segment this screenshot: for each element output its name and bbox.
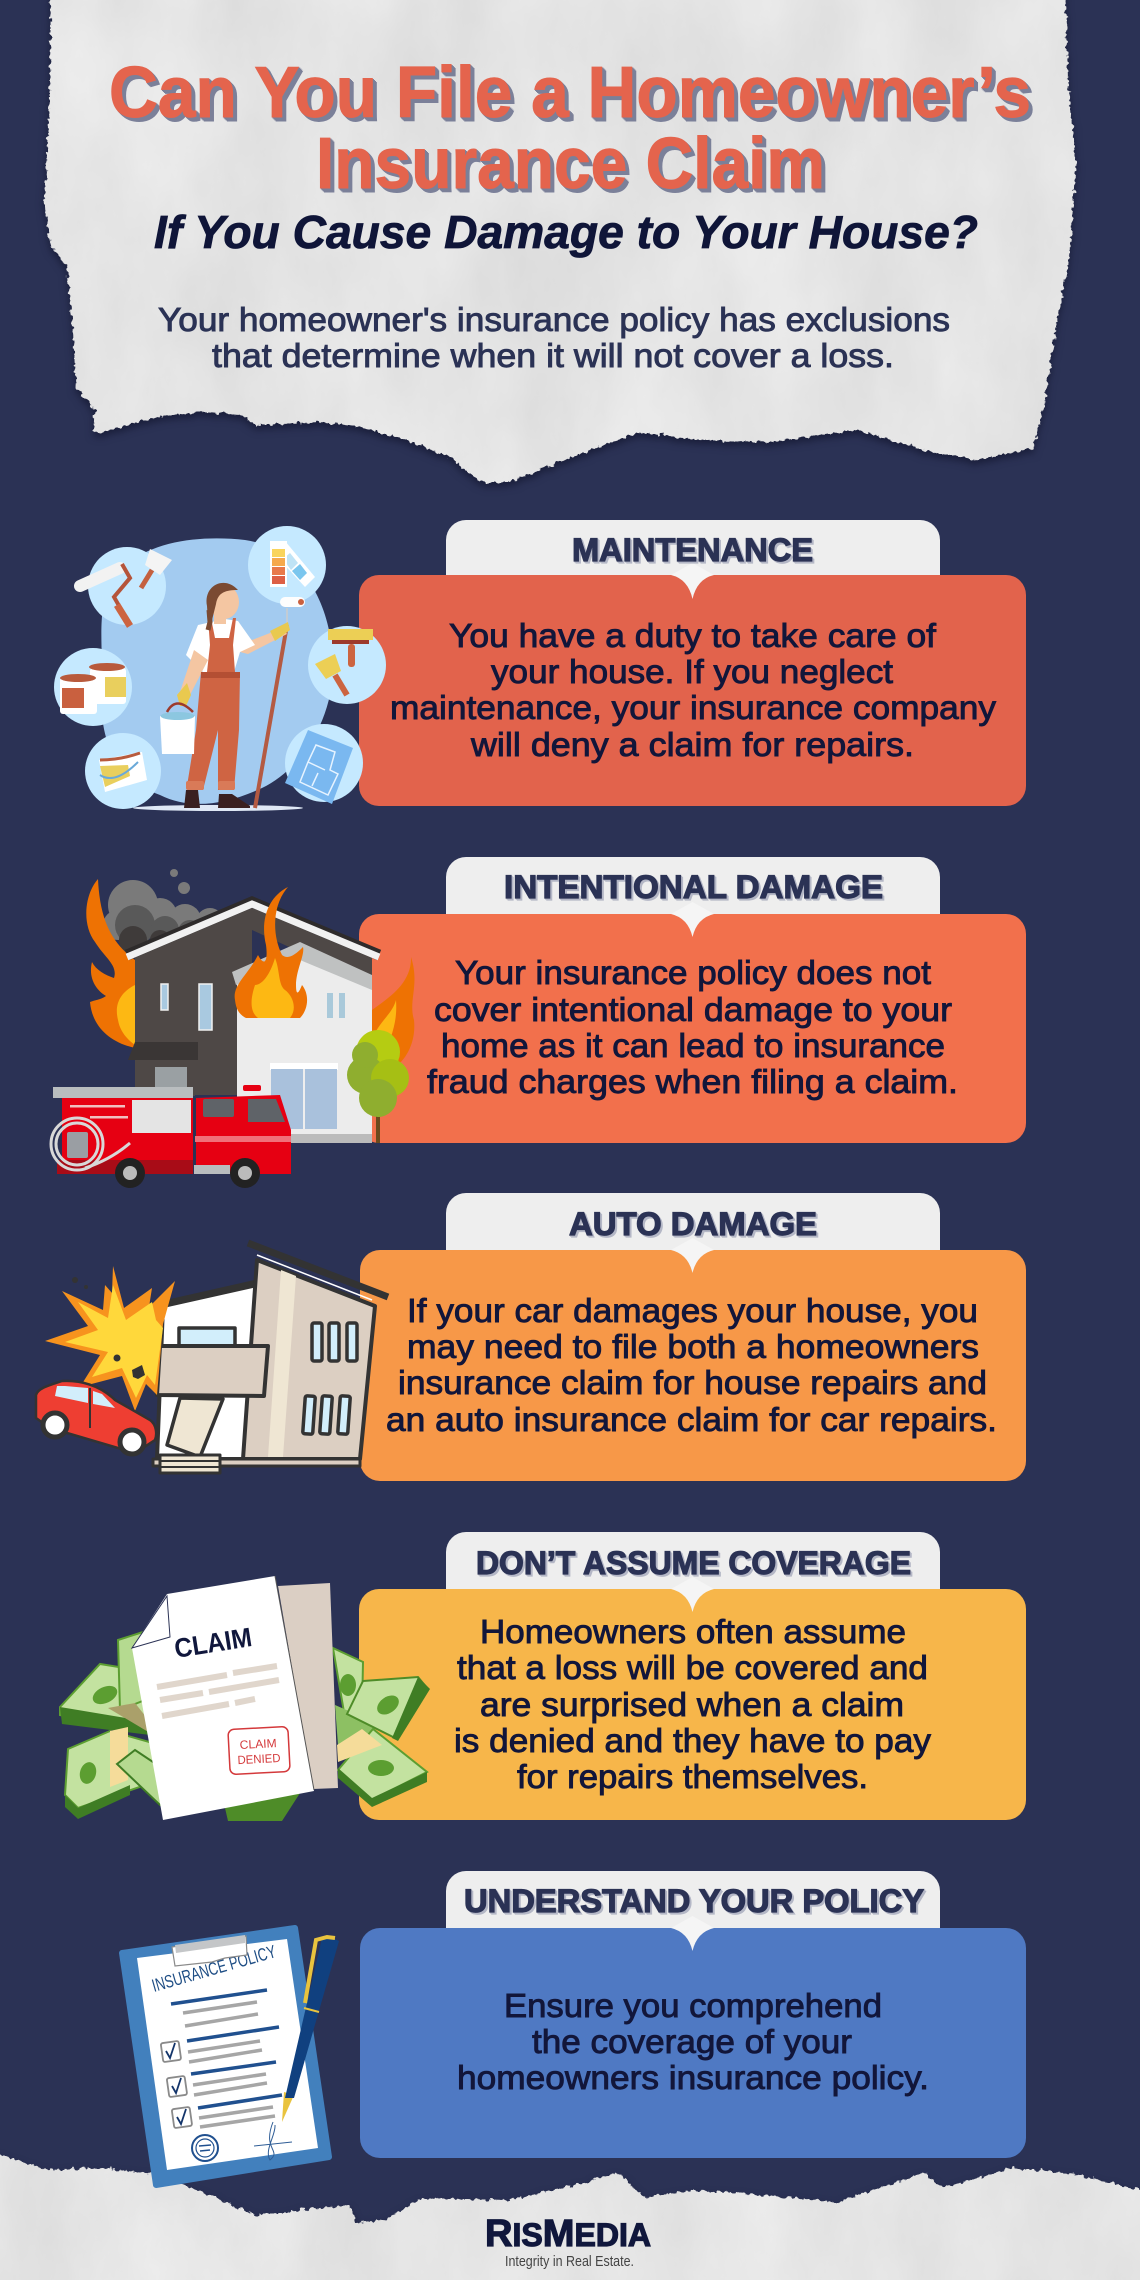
icon: brushes <box>315 629 373 695</box>
panel: auto damage: AUTO DAMAGE <box>569 1206 817 1242</box>
panel: understand your policy <box>360 1871 1026 2158</box>
icon: paint cans <box>60 663 126 714</box>
panel: intentional damage: INTENTIONAL DAMAGE <box>504 869 883 905</box>
panel: don't assume coverage: for repairs themselves. <box>517 1758 868 1795</box>
illustration: denied claim on cash <box>60 1576 430 1821</box>
icon: blob background <box>101 538 333 804</box>
icon: clipboard <box>122 1928 329 2185</box>
panel: auto damage: may need to file both a homeowners <box>407 1328 979 1365</box>
icon: house <box>127 902 379 1143</box>
panel: intentional damage: Your insurance policy does not <box>455 954 931 991</box>
intro text: Your homeowner's insurance policy has exclusions <box>158 301 950 338</box>
panel: auto damage: an auto insurance claim for car repairs. <box>386 1401 997 1438</box>
logo: RISMedia: Integrity in Real Estate. <box>505 2253 634 2270</box>
icon: middle flame <box>235 887 307 1018</box>
illustration: burning house with fire truck <box>51 869 414 1188</box>
illustration: car crashing into house <box>36 1243 388 1473</box>
intro text <box>158 301 950 374</box>
icon: left flame <box>86 879 135 1048</box>
icon: right flame <box>372 957 414 1063</box>
title <box>109 53 1031 204</box>
illustration: woman painter with tools <box>54 526 386 811</box>
torn paper footer <box>0 2150 1140 2280</box>
panel: maintenance: MAINTENANCE <box>572 532 813 568</box>
panel: intentional damage: home as it can lead to insurance <box>441 1027 945 1064</box>
illustration: insurance policy clipboard and pen <box>122 1928 339 2185</box>
icon: clip <box>172 1935 247 1966</box>
intro text: that determine when it will not cover a loss. <box>212 337 894 374</box>
panel: don't assume coverage <box>359 1532 1026 1820</box>
icon: blueprint <box>285 730 353 804</box>
panel: understand your policy: homeowners insurance policy. <box>457 2059 929 2096</box>
panel: maintenance: your house. If you neglect <box>491 653 893 690</box>
panel: understand your policy: Ensure you comprehend <box>504 1987 882 2024</box>
icon: claim document: DENIED <box>237 1751 281 1767</box>
panel: maintenance: maintenance, your insurance company <box>390 689 997 726</box>
panel: intentional damage: cover intentional damage to your <box>434 991 952 1028</box>
icon: colour swatches <box>270 541 315 587</box>
panel: intentional damage <box>359 857 1026 1143</box>
panel: don't assume coverage: DON’T ASSUME COVERAGE <box>476 1545 911 1581</box>
panel: auto damage: If your car damages your house, you <box>407 1292 978 1329</box>
panel: don't assume coverage: is denied and they have to pay <box>454 1722 932 1759</box>
panel: auto damage <box>360 1193 1026 1481</box>
icon: pen <box>282 1937 339 2122</box>
icon: back sheet <box>278 1583 338 1789</box>
icon: painter figure <box>160 583 305 808</box>
panel: intentional damage: fraud charges when filing a claim. <box>427 1063 958 1100</box>
panel: understand your policy: the coverage of your <box>532 2023 852 2060</box>
panel: maintenance: will deny a claim for repairs. <box>470 726 914 763</box>
icon: claim document: CLAIM <box>239 1736 277 1752</box>
panel: auto damage: insurance claim for house repairs and <box>398 1364 987 1401</box>
title: Insurance Claim <box>316 124 825 204</box>
logo: RISMedia: RISMEDIA <box>485 2213 651 2255</box>
panel: understand your policy: UNDERSTAND YOUR POLICY <box>464 1883 924 1919</box>
title: Can You File a Homeowner’s <box>109 53 1031 133</box>
icon: red car <box>36 1381 156 1454</box>
torn paper header <box>44 0 1076 482</box>
icon: policy sheet <box>137 1939 318 2170</box>
icon: fire truck <box>51 1085 291 1188</box>
subtitle: If You Cause Damage to Your House? <box>154 206 978 258</box>
icon: claim document: CLAIM <box>172 1622 254 1664</box>
panel: maintenance: You have a duty to take care of <box>449 617 937 654</box>
icon: paint tub <box>99 752 147 792</box>
icon: roller and brush <box>80 549 172 626</box>
icon: claim document <box>132 1576 314 1820</box>
icon: tree <box>347 1030 409 1143</box>
icon: tool bubbles <box>54 526 386 809</box>
icon: ground shadow <box>133 805 303 811</box>
icon: crash burst <box>45 1266 175 1411</box>
panel: maintenance <box>359 520 1026 806</box>
panel: don't assume coverage: Homeowners often assume <box>480 1613 906 1650</box>
icon: policy sheet: INSURANCE POLICY <box>150 1941 278 1996</box>
icon: house <box>153 1243 388 1473</box>
icon: smoke <box>103 869 224 954</box>
panel: don't assume coverage: that a loss will be covered and <box>457 1649 928 1686</box>
icon: cash stacks <box>60 1632 430 1821</box>
panel: don't assume coverage: are surprised when a claim <box>480 1686 904 1723</box>
